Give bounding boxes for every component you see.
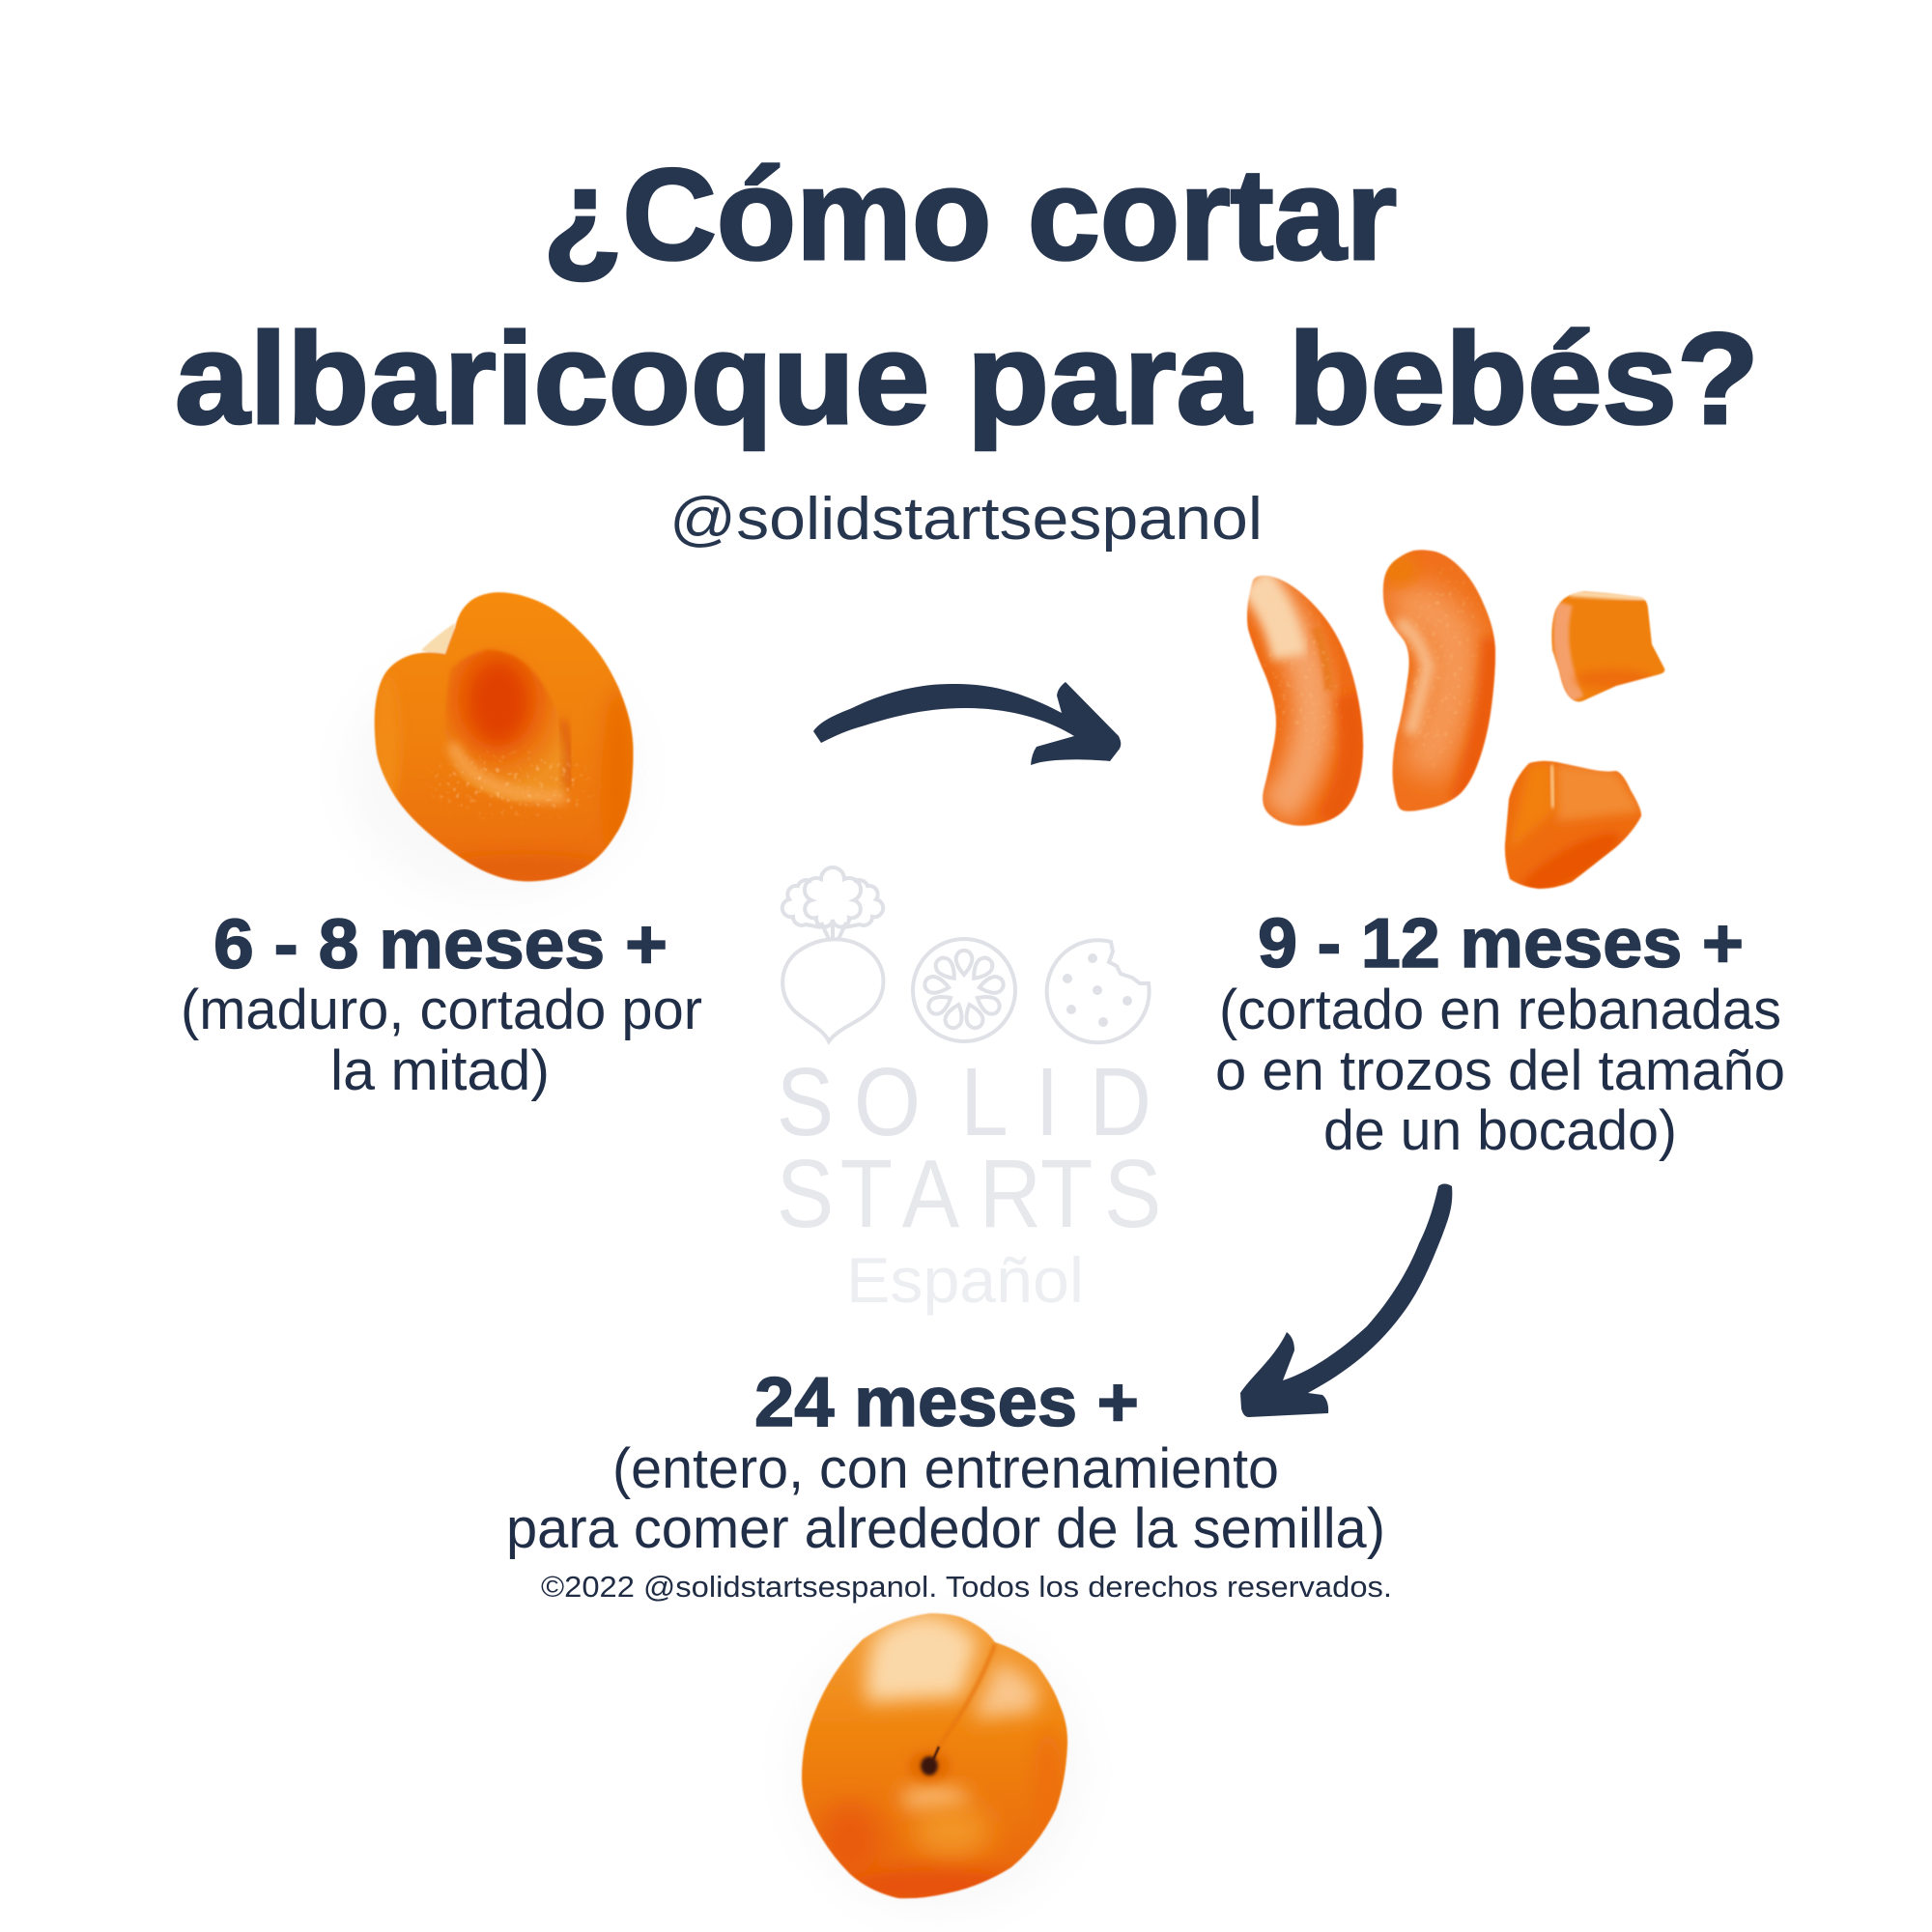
title: ¿Cómo cortar [543,143,1397,287]
label: 6-8 months [181,906,702,1102]
shadow under whole apricot [792,1623,1082,1913]
apricot slices and chunks [1241,546,1664,907]
chunk 1 [1551,591,1664,701]
label: 9-12 months: (cortado en rebanadas [1219,979,1781,1041]
label: 6-8 months: 6 - 8 meses + [213,906,668,983]
title [175,143,1759,451]
logo wordmark [777,1048,1161,1248]
label: 9-12 months: 9 - 12 meses + [1258,905,1744,982]
logo wordmark: Español: Español [846,1244,1084,1316]
shadow under halved apricot [348,647,638,898]
slice 1 [1241,570,1367,831]
icon: turnip [782,867,883,1041]
label: 24 months [506,1364,1385,1560]
label: 9-12 months [1215,905,1785,1162]
halved apricot [373,592,636,885]
slice 2 [1381,549,1497,812]
chunk 2 [1505,761,1642,907]
label: 24 months: para comer alrededor de la semilla) [506,1497,1385,1560]
logo wordmark: STARTS [777,1140,1161,1248]
label: 9-12 months: o en trozos del tamaño [1215,1039,1785,1102]
icon: cookie [1047,940,1150,1042]
label: 6-8 months: la mitad) [330,1039,550,1102]
arrow: halved to slices [813,682,1121,765]
arrow: slices to whole [1240,1184,1452,1417]
label: 24 months: 24 meses + [754,1364,1139,1441]
copyright: ©2022 @solidstartsespanol. Todos los derechos reservados. [541,1570,1392,1604]
icon: fruit slice [913,939,1015,1041]
title: albaricoque para bebés? [175,307,1759,451]
label: 24 months: (entero, con entrenamiento [612,1437,1279,1500]
logo wordmark: SOLID [777,1048,1151,1156]
watermark logo [777,867,1161,1316]
label: 9-12 months: de un bocado) [1323,1099,1677,1162]
handle: @solidstartsespanol [669,486,1263,553]
whole apricot [802,1613,1067,1901]
label: 6-8 months: (maduro, cortado por [181,979,702,1041]
